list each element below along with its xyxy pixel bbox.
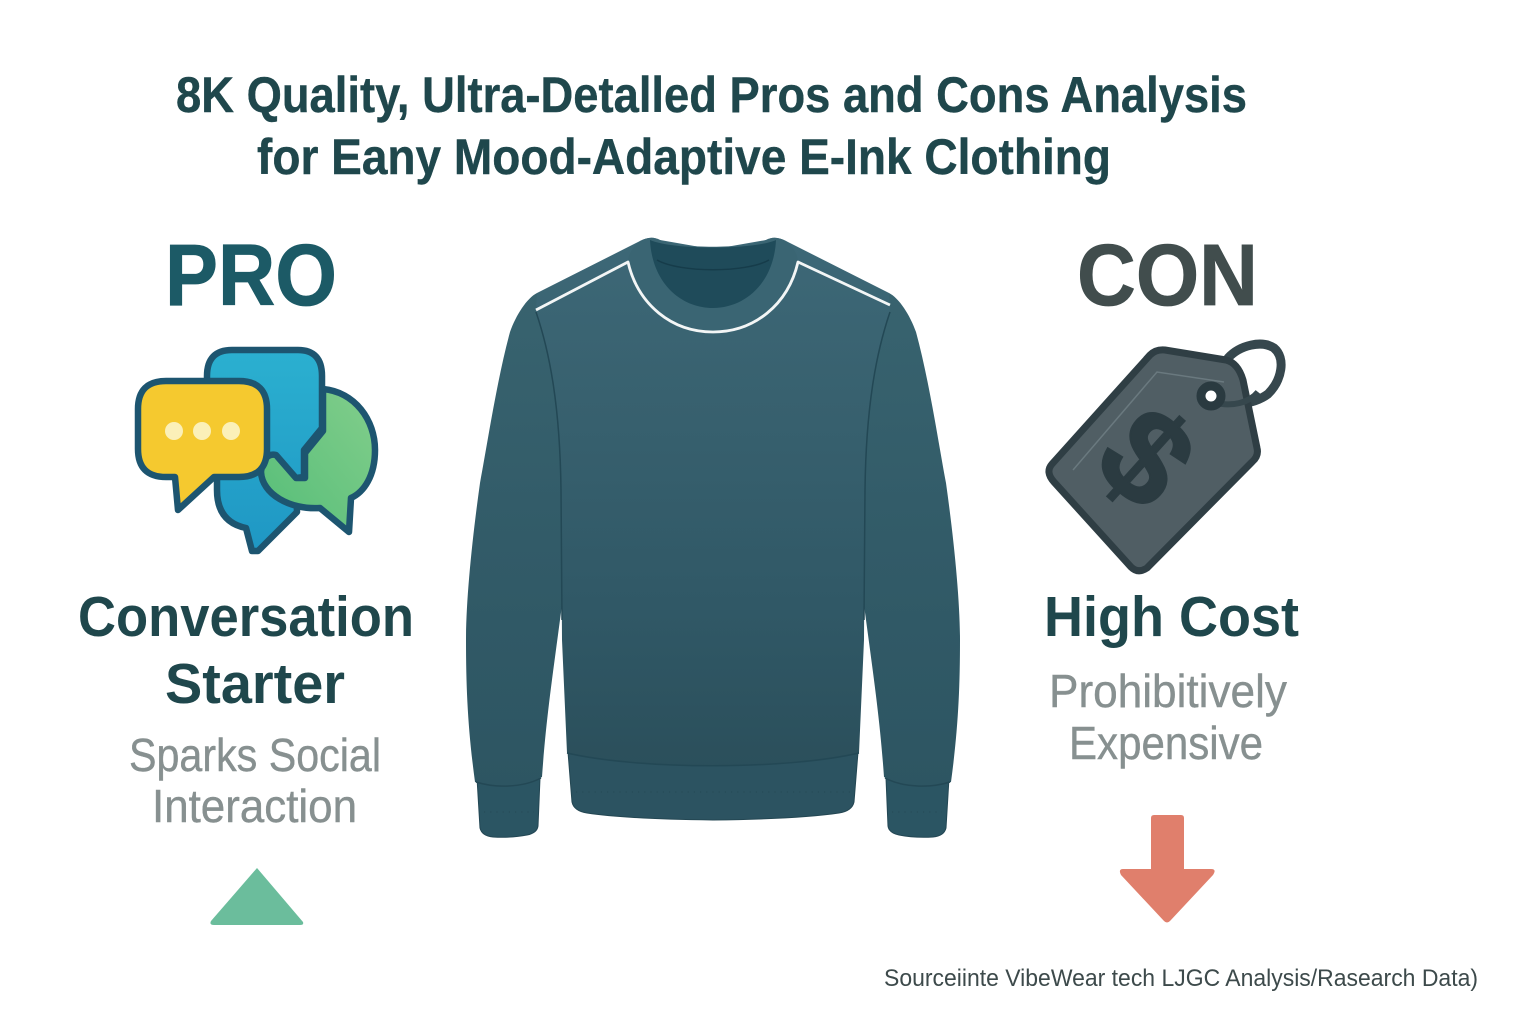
seams [476, 312, 950, 786]
right cuff [886, 778, 949, 837]
title: for Eany Mood-Adaptive E-Ink Clothing [257, 129, 1111, 185]
illustration: sweatshirt [466, 238, 960, 837]
heading: conversation starter: Conversation [78, 585, 414, 649]
heading: conversation starter [78, 585, 414, 716]
dollar sign: $ [1070, 378, 1223, 537]
back collar line [657, 260, 769, 270]
text: prohibitively expensive [1049, 665, 1287, 769]
title: 8K Quality, Ultra-Detalled Pros and Cons Analysis [176, 67, 1247, 123]
white piping [536, 262, 890, 332]
heading: high cost: High Cost [1044, 585, 1299, 649]
neck opening [650, 240, 776, 308]
arrow: down [1120, 815, 1215, 922]
body [536, 238, 890, 766]
heading: CON: CON [1077, 227, 1258, 324]
arrow: up triangle [210, 868, 303, 925]
source note: Sourceiinte VibeWear tech LJGC Analysis/Rasearch Data) [884, 965, 1478, 992]
ribbing [484, 792, 942, 812]
text: prohibitively expensive: Expensive [1069, 717, 1263, 769]
icon: price tag [1049, 344, 1281, 571]
sleeves [466, 293, 566, 786]
collar band [628, 238, 798, 332]
heading: conversation starter: Starter [165, 652, 345, 716]
text: sparks social interaction [129, 729, 381, 832]
icon: speech bubbles [138, 350, 375, 551]
panel: pro [78, 227, 414, 925]
panel: con [1044, 227, 1299, 922]
heading: PRO: PRO [165, 227, 337, 324]
text: sparks social interaction: Sparks Social [129, 729, 381, 781]
text: prohibitively expensive: Prohibitively [1049, 665, 1287, 717]
left cuff [477, 778, 540, 837]
hem [568, 752, 858, 820]
title [176, 67, 1247, 185]
text: sparks social interaction: Interaction [152, 780, 357, 832]
